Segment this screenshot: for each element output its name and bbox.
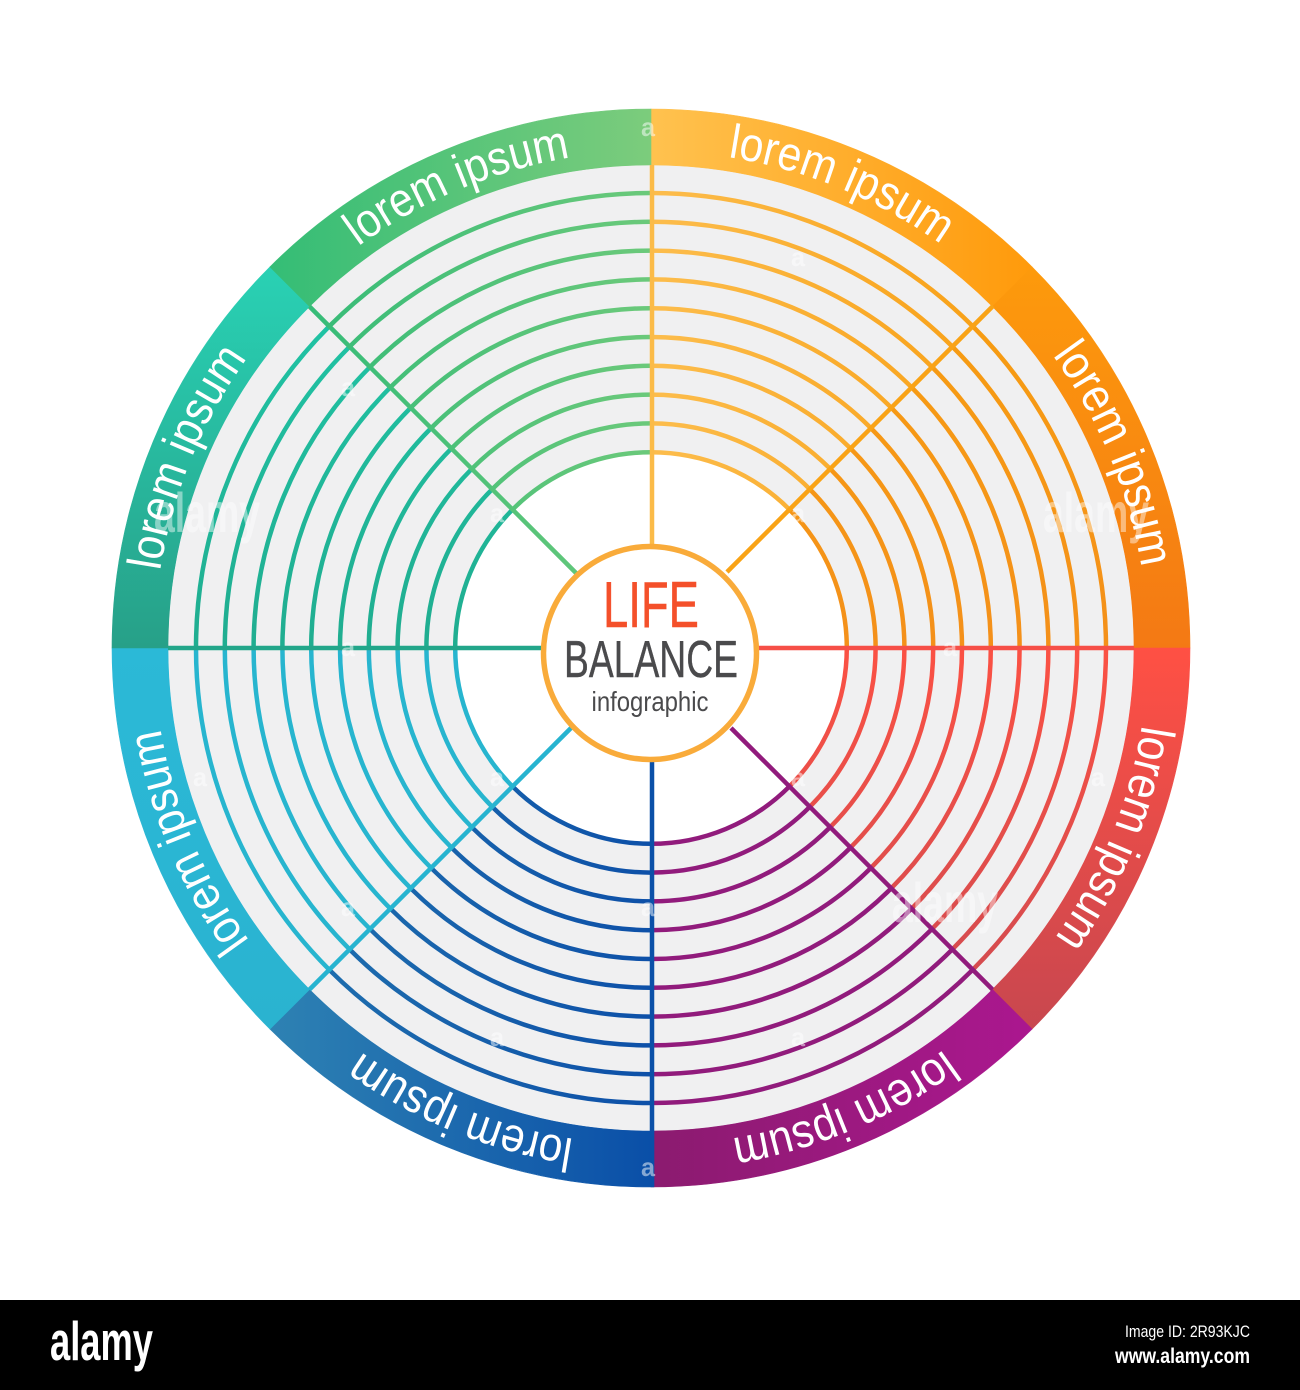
- watermarks: alamy: [892, 871, 998, 934]
- centre badge: [544, 546, 756, 760]
- centre title: BALANCE: BALANCE: [564, 631, 738, 689]
- label: orange sector: lorem ipsum: [1054, 337, 1166, 565]
- watermarks: a: [641, 1152, 656, 1182]
- rings: cyan sector: [196, 193, 1106, 1103]
- label: red sector: lorem ipsum: [1056, 728, 1176, 948]
- watermarks: a: [641, 112, 656, 142]
- curved band labels: [126, 123, 1176, 1173]
- rings: orange sector: [196, 193, 1106, 1103]
- watermarks: a: [1091, 762, 1106, 792]
- label: yellow-orange sector: lorem ipsum: [730, 123, 951, 242]
- label: green sector: lorem ipsum: [340, 134, 568, 245]
- watermarks: a: [791, 762, 806, 792]
- rings: blue sector: [196, 193, 1106, 1103]
- watermarks: alamy: [154, 481, 260, 544]
- footer url: www.alamy.com: [1114, 1345, 1250, 1368]
- watermarks: alamy: [1043, 481, 1149, 544]
- label: teal sector: lorem ipsum: [126, 348, 246, 568]
- footer bar: [0, 1300, 1300, 1390]
- centre title: LIFE: LIFE: [603, 568, 699, 641]
- label: blue sector: lorem ipsum: [351, 1054, 572, 1173]
- watermarks: a: [341, 892, 356, 922]
- footer image id: Image ID: 2R93KJC: [1125, 1322, 1250, 1341]
- band: outer coloured ring: [112, 109, 1190, 1187]
- rings: green sector: [196, 193, 1106, 1103]
- watermarks: a: [193, 762, 208, 792]
- rings: red sector: [196, 193, 1106, 1103]
- rings: teal sector: [196, 193, 1106, 1103]
- watermarks: a: [490, 498, 505, 528]
- spokes: sector dividers: [168, 165, 1134, 1132]
- watermarks: a: [641, 892, 656, 922]
- rings: yellow-orange sector: [196, 193, 1106, 1103]
- watermarks: a: [791, 1022, 806, 1052]
- centre subtitle: infographic: infographic: [592, 686, 708, 717]
- footer logo: alamy: alamy: [50, 1310, 153, 1372]
- watermarks: a: [791, 498, 806, 528]
- watermarks: a: [341, 632, 356, 662]
- watermarks: a: [943, 632, 958, 662]
- watermarks: a: [341, 372, 356, 402]
- rings: purple sector: [196, 193, 1106, 1103]
- watermarks: a: [490, 1022, 505, 1052]
- watermarks: a: [791, 242, 806, 272]
- watermarks: a: [490, 762, 505, 792]
- watermarks: [154, 112, 1149, 1182]
- label: cyan sector: lorem ipsum: [136, 731, 248, 959]
- grey ring background: [312, 308, 990, 988]
- label: purple sector: lorem ipsum: [734, 1051, 962, 1162]
